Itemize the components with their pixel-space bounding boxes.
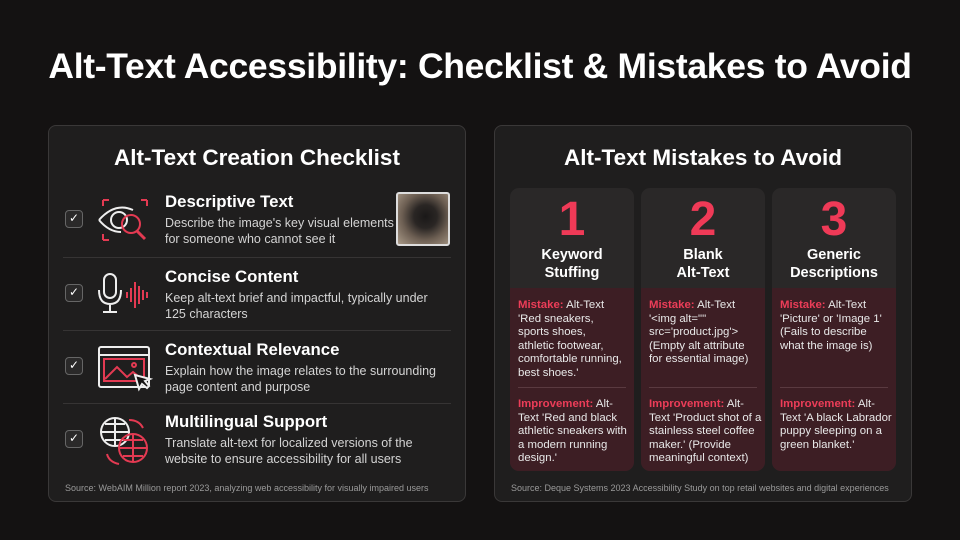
photo: puppy xyxy=(396,192,450,246)
card 2: blank alt-text: for essential image) xyxy=(649,353,748,365)
icon: browser image xyxy=(98,346,153,392)
row title: Multilingual Support xyxy=(165,412,327,431)
icon: eye with magnifier xyxy=(98,199,148,241)
icon: globes xyxy=(100,417,148,465)
card 1: keyword stuffing: athletic sneakers with xyxy=(518,425,627,437)
card 1: keyword stuffing: Improvement: Alt- xyxy=(518,398,613,410)
card 1: keyword stuffing: a modern running xyxy=(518,438,607,450)
card 1: keyword stuffing: Stuffing xyxy=(545,265,599,281)
card 3: generic descriptions: green blanket.' xyxy=(780,438,854,450)
row text: page content and purpose xyxy=(165,380,310,394)
card 1: keyword stuffing: comfortable running, xyxy=(518,353,622,365)
card 2: blank alt-text: (Empty alt attribute xyxy=(649,340,745,352)
card 1: keyword stuffing: 1 xyxy=(559,193,585,246)
card 3: generic descriptions: (Fails to describe xyxy=(780,326,867,338)
card 3: generic descriptions: puppy sleeping on a xyxy=(780,425,882,437)
row text xyxy=(165,364,436,394)
row text: Describe the image's key visual elements xyxy=(165,216,394,230)
panel: mistakes xyxy=(494,125,912,502)
card 3: generic descriptions: Improvement: Alt- xyxy=(780,398,875,410)
row: descriptive text xyxy=(65,192,450,246)
row text: Explain how the image relates to the surrounding xyxy=(165,364,436,378)
card 2: blank alt-text xyxy=(641,188,765,471)
row title: Concise Content xyxy=(165,267,298,286)
row: contextual relevance: ✓ xyxy=(69,358,79,372)
card 1: keyword stuffing: Keyword xyxy=(541,247,603,263)
row: multilingual support xyxy=(65,412,413,466)
card 2: blank alt-text: maker.' (Provide xyxy=(649,438,731,450)
card 3: generic descriptions: 'Picture' or 'Image 1' xyxy=(780,312,882,324)
card 2: blank alt-text: 2 xyxy=(690,193,716,246)
row text xyxy=(165,216,394,246)
row text: for someone who cannot see it xyxy=(165,232,335,246)
card 1: keyword stuffing: Mistake: Alt-Text xyxy=(518,299,604,311)
card 1: keyword stuffing xyxy=(510,188,634,471)
card 1: keyword stuffing: sports shoes, xyxy=(518,326,586,338)
title: Alt-Text Accessibility: Checklist & Mistakes to Avoid xyxy=(48,46,912,86)
icon: microphone xyxy=(98,273,148,313)
card 3: generic descriptions: what the image is) xyxy=(780,340,872,352)
row: contextual relevance xyxy=(65,340,436,394)
card 1: keyword stuffing: athletic footwear, xyxy=(518,340,603,352)
card 3: generic descriptions: 3 xyxy=(821,193,847,246)
card 2: blank alt-text: Mistake: Alt-Text xyxy=(649,299,735,311)
card 2: blank alt-text: Improvement: Alt- xyxy=(649,398,744,410)
row text xyxy=(165,436,413,466)
row: concise content xyxy=(65,267,428,321)
row: multilingual support: ✓ xyxy=(69,431,79,445)
card 2: blank alt-text: meaningful context) xyxy=(649,452,748,464)
card 1: keyword stuffing: design.' xyxy=(518,452,557,464)
card 3: generic descriptions: Generic xyxy=(807,247,861,263)
card 2: blank alt-text: stainless steel coffee xyxy=(649,425,755,437)
checklist heading: Alt-Text Creation Checklist xyxy=(114,145,400,170)
card 3: generic descriptions: Descriptions xyxy=(790,265,878,281)
card 3: generic descriptions: Text 'A black Labrador xyxy=(780,412,892,424)
row text: Translate alt-text for localized versions of the xyxy=(165,436,413,450)
card 2: blank alt-text: Text 'Product shot of a xyxy=(649,412,761,424)
row text: Keep alt-text brief and impactful, typically under xyxy=(165,291,428,305)
row title: Descriptive Text xyxy=(165,192,293,211)
source note: Source: WebAIM Million report 2023, analyzing web accessibility for visually impaired users xyxy=(65,483,428,493)
source note: Source: Deque Systems 2023 Accessibility Study on top retail websites and digital experiences xyxy=(511,483,889,493)
row: concise content: ✓ xyxy=(69,285,79,299)
card 3: generic descriptions xyxy=(772,188,896,471)
row title: Contextual Relevance xyxy=(165,340,339,359)
mistakes heading: Alt-Text Mistakes to Avoid xyxy=(564,145,842,170)
card 1: keyword stuffing: Text 'Red and black xyxy=(518,412,617,424)
row: descriptive text: ✓ xyxy=(69,211,79,225)
row text: website to ensure accessibility for all users xyxy=(165,452,401,466)
panel: checklist xyxy=(48,125,466,502)
card 2: blank alt-text: Blank xyxy=(683,247,723,263)
card 3: generic descriptions: Mistake: Alt-Text xyxy=(780,299,866,311)
card 1: keyword stuffing: best shoes.' xyxy=(518,366,578,378)
card 1: keyword stuffing: 'Red sneakers, xyxy=(518,312,594,324)
card 2: blank alt-text: '<img alt="" xyxy=(649,312,706,324)
card 2: blank alt-text: Alt-Text xyxy=(677,265,729,281)
row text xyxy=(165,291,428,321)
card 2: blank alt-text: src='product.jpg'> xyxy=(649,326,738,338)
row text: 125 characters xyxy=(165,307,248,321)
